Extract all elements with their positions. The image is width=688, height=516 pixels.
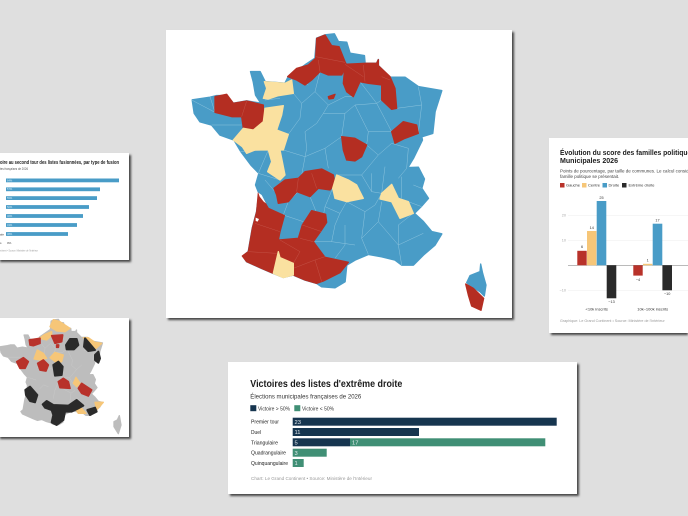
row labels: Premier tour — [251, 420, 279, 426]
bar value labels: 17 — [655, 218, 660, 222]
icon: Gironde estuary and Arcachon basin — [256, 193, 266, 222]
x-axis labels: 10k–100k inscrits — [637, 306, 668, 312]
map: grey France with highlighted departments — [0, 319, 121, 434]
y-axis labels — [560, 214, 566, 293]
panel: small map of France — [0, 318, 131, 439]
map: metropolitan France by winning political family — [192, 34, 486, 310]
heading: oire au second tour des listes fusionnées, par type de fusion — [0, 160, 119, 166]
bars — [293, 418, 557, 467]
bar value labels: 46% — [7, 214, 13, 218]
bars: under 10k registered — [577, 201, 616, 298]
region: red departments (gauche) — [215, 35, 418, 283]
orange departments — [34, 320, 103, 413]
bar value labels — [581, 196, 670, 304]
axis labels: ale — [0, 232, 4, 236]
bar value labels: 50% — [7, 205, 13, 209]
legend: Centre — [588, 183, 601, 188]
legend: Victoire < 50% — [302, 406, 334, 412]
row labels: Quinquangulaire — [251, 461, 288, 467]
row labels — [251, 420, 288, 467]
bars — [6, 178, 119, 236]
axis labels — [0, 232, 12, 245]
bar values: 3 — [294, 451, 298, 457]
subtitle: Élections municipales françaises de 2026 — [250, 392, 362, 400]
bar value labels: 38% — [7, 232, 13, 236]
grid and axis — [568, 215, 688, 290]
bar value labels: 1 — [647, 258, 649, 262]
bar values: 23 — [294, 420, 301, 426]
x-axis labels — [586, 306, 668, 312]
bar values: 1 — [294, 461, 298, 467]
bar value labels: 14 — [590, 226, 594, 230]
legend — [560, 183, 655, 188]
subtitle: tes françaises de 2026 — [0, 167, 28, 171]
bar value labels: 25 — [599, 196, 604, 200]
bars: 10k to 100k registered — [633, 224, 672, 290]
bar value labels — [7, 178, 13, 236]
y-axis labels: 20 — [562, 214, 566, 218]
source: ntinent • Source: Ministère de l'Intérieur — [0, 248, 38, 252]
bar value labels: −13 — [608, 300, 615, 304]
bar values: 11 — [294, 430, 301, 436]
source: Graphique: Le Grand Continent • Source: Ministère de l'Intérieur — [560, 319, 665, 323]
y-axis labels: −10 — [560, 289, 566, 293]
bar value labels: 43% — [7, 223, 13, 227]
region: Corsica — [466, 264, 486, 310]
panel: evolution of political family scores: Municipales 2026 — [560, 156, 618, 165]
panel: evolution of political family scores: famille politique se présentait. — [560, 174, 619, 179]
panel: far-right list victories — [228, 362, 579, 496]
legend: Victoire > 50% — [258, 406, 290, 412]
row labels: Triangulaire — [251, 440, 278, 446]
row labels: Duel — [251, 430, 261, 436]
axis labels: s — [0, 241, 2, 245]
legend: Droite — [608, 183, 620, 188]
legend: Extrême droite — [628, 183, 655, 188]
source: Chart: Le Grand Continent • Source: Ministère de l'Intérieur — [251, 476, 372, 482]
panel: evolution of political family scores — [549, 138, 688, 335]
bar value labels: 55% — [7, 196, 13, 200]
bar value labels: 64% — [7, 178, 13, 182]
bar values: 17 — [352, 440, 358, 446]
panel: bar chart of second-round lists by fusion type — [0, 153, 131, 262]
row labels: Quadrangulaire — [251, 451, 286, 457]
bar value labels: 57% — [7, 187, 13, 191]
bar value labels: −4 — [636, 278, 640, 282]
red departments — [17, 335, 92, 396]
bar values — [294, 420, 358, 467]
bar value labels: 6 — [581, 245, 583, 249]
legend: Gauche — [566, 183, 581, 188]
black departments — [25, 338, 100, 425]
axis labels: 0% — [7, 241, 12, 245]
bar values: 5 — [294, 440, 298, 446]
bar value labels: −10 — [664, 292, 670, 296]
x-axis labels: <10k inscrits — [586, 306, 608, 312]
region: blue departments (droite) — [192, 34, 442, 288]
legend — [250, 405, 334, 412]
heading: Victoires des listes d'extrême droite — [250, 379, 403, 390]
y-axis labels: 10 — [562, 239, 566, 243]
panel: main map of France — [166, 30, 514, 320]
icon: Corsica — [114, 416, 121, 434]
region: cream departments (centre) — [233, 80, 413, 278]
